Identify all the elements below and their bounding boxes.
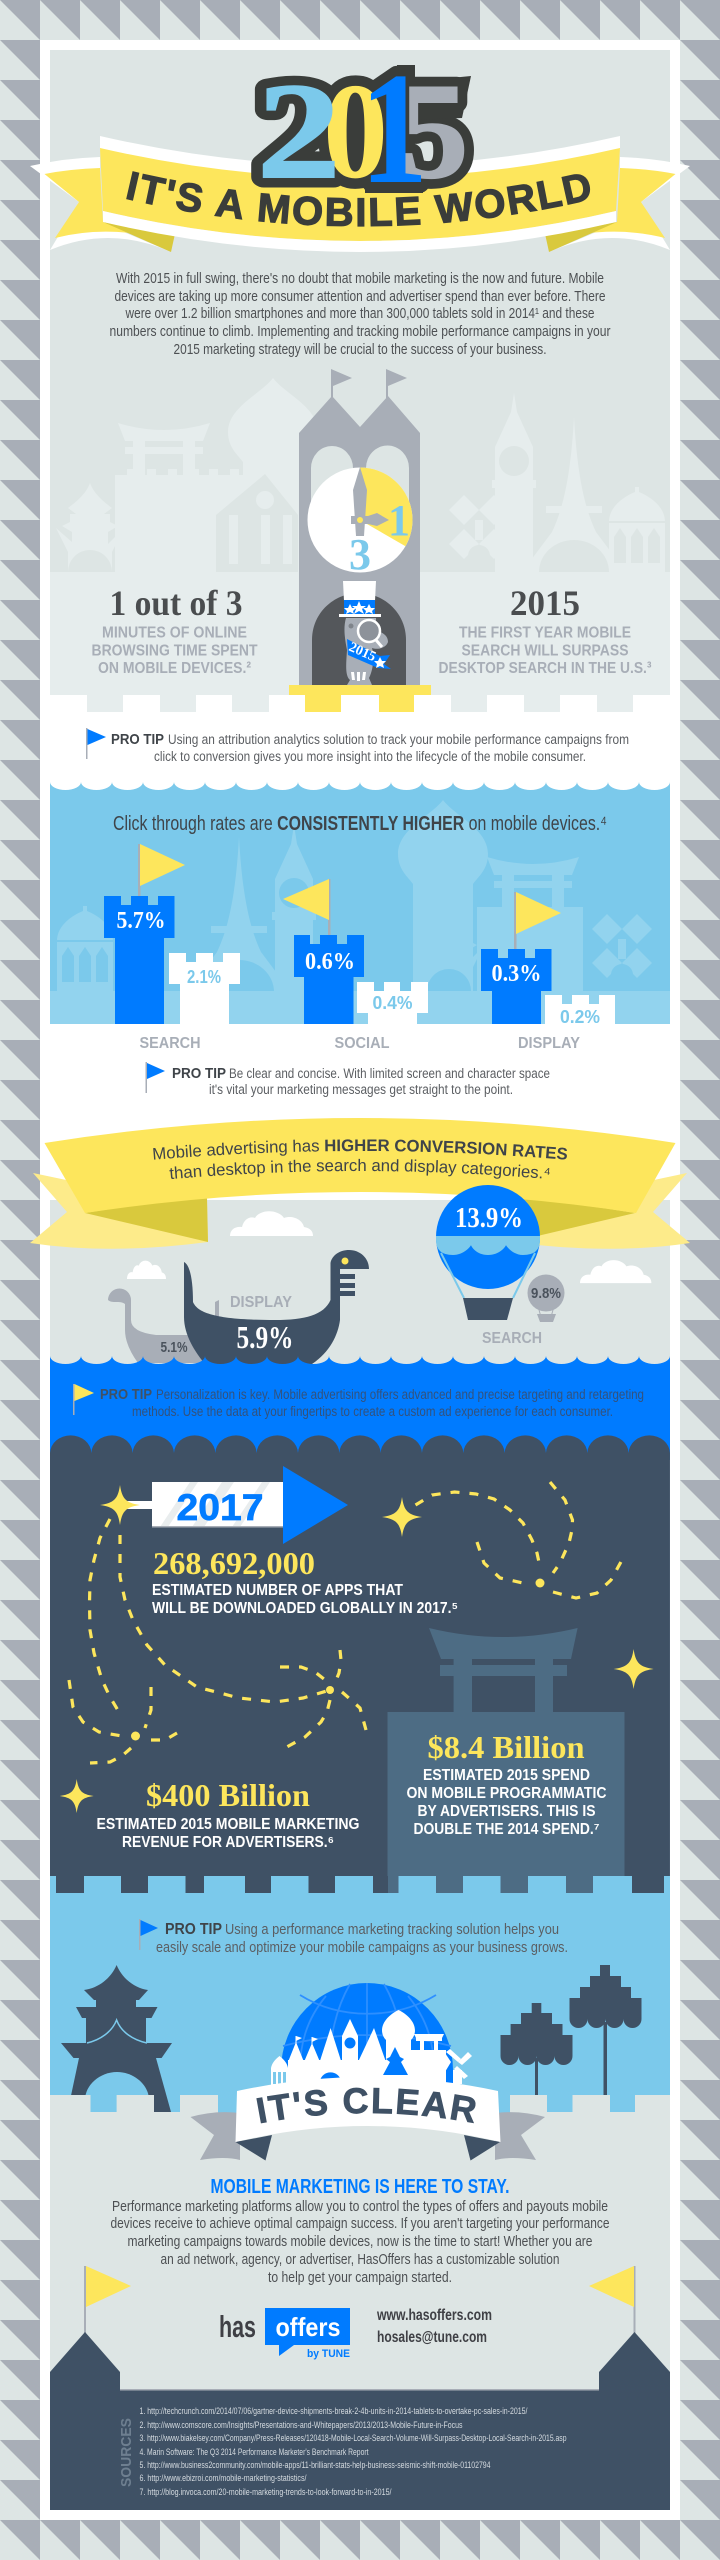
contact details: hosales@tune.com [377,2329,487,2346]
panel: blue water with pro tip 3 [50,1356,670,1460]
contact details [376,2307,492,2346]
stat: 2015 first year: SEARCH WILL SURPASS [462,642,629,660]
contact details: www.hasoffers.com [376,2307,492,2324]
banner: It's clear: IT'S CLEAR [256,2088,476,2124]
pro tip 2: Be clear and concise. With limited screen and character space [229,1066,550,1081]
bar chart: social: 0.6% [305,949,355,975]
logo: 2015 numerals: 2 [257,56,341,207]
bar chart: search: 5.7% [116,908,166,934]
logo: 2015 numerals [257,41,471,218]
stat: 2015 first year: THE FIRST YEAR MOBILE [459,624,631,642]
stat: 1 out of 3: ON MOBILE DEVICES.² [98,660,251,677]
stat: programmatic spend: DOUBLE THE 2014 SPEND.⁷ [414,1821,600,1838]
panel: dark 2017 section [50,1435,670,2116]
stat: 1 out of 3 [92,583,258,677]
heading: mobile marketing is here to stay: MOBILE MARKETING IS HERE TO STAY. [210,2176,510,2198]
block: torii and spend panel [388,1628,624,1876]
banner: conversion rates [30,1118,690,1249]
bar chart: display [481,892,615,1052]
text block: closing paragraph [110,2199,610,2286]
bar chart: display: 0.2% [560,1007,600,1027]
white band after chart [50,1024,670,1200]
banner: It's a mobile world [30,136,690,252]
sources: 6. http://www.ebizroi.com/mobile-marketing-statistics/ [140,2473,307,2483]
title: 2015 it's a mobile world [30,41,690,252]
heading: conversion rates [153,1139,567,1179]
heading: conversion rates: Mobile advertising has HIGHER CONVERSION RATES [153,1139,567,1160]
stat: programmatic spend: BY ADVERTISERS. THIS IS [418,1803,596,1820]
logo: has offers by TUNE: by TUNE [307,2348,350,2360]
pro tip 4: Using a performance marketing tracking solution helps you [225,1922,559,1938]
chart: gondolas display: 5.1% [160,1339,188,1356]
logo: has offers by TUNE: has [219,2309,256,2344]
text block: intro paragraph: were over 1.2 billion smartphones and more than 300,000 tablets sold in 2014¹ and these [125,306,595,322]
bar chart: social: 0.4% [372,993,412,1013]
text block: intro paragraph: devices are taking up more consumer attention and advertiser spend than ever before. There [114,289,606,305]
text block: closing paragraph: Performance marketing platforms allow you to control the types of offers and payouts mobile [112,2199,608,2215]
bar chart: social: SOCIAL [334,1035,390,1052]
tower base [289,685,431,695]
panel: blue water with pro tip 3: Personalization is key. Mobile advertising offers advanced and precise targeting and retargeting [156,1387,644,1402]
stat: apps downloaded: ESTIMATED NUMBER OF APPS THAT [152,1582,403,1599]
bar chart: display: 0.3% [492,961,542,987]
icon: dots [131,1578,544,1740]
text block: closing paragraph: an ad network, agency, or advertiser, HasOffers has a customizable solution [160,2252,560,2268]
stat: apps downloaded: WILL BE DOWNLOADED GLOBALLY IN 2017.⁵ [152,1600,458,1617]
bar chart: search [104,844,240,1052]
stat: 1 out of 3: MINUTES OF ONLINE [102,624,247,642]
text block: closing paragraph: devices receive to achieve optimal campaign success. If you aren't targeting your performance [110,2216,610,2232]
logo: 2015 numerals: 5 [400,55,468,207]
white merlons and pro tip band [50,695,670,782]
chart: clock pie 1 of 3: 1 [388,496,410,545]
stat: programmatic spend: $8.4 Billion [428,1729,585,1765]
icon: stars [60,1485,654,1813]
footer castle with flags [50,2266,670,2510]
icon: globe with skyline [271,1983,472,2092]
stat: 2015 first year [438,583,652,677]
chart: gondolas display: 5.9% [236,1319,294,1355]
stat: programmatic spend: ESTIMATED 2015 SPEND [423,1767,590,1784]
logo: has offers by TUNE [219,2308,350,2360]
panel: blue water with pro tip 3: PRO TIP [100,1386,152,1403]
text block: closing paragraph: marketing campaigns towards mobile devices, now is the time to start! Whether you are [128,2234,592,2250]
dashed flight paths [69,1482,622,1763]
bar chart: display: DISPLAY [518,1035,580,1052]
chart: balloons search: 13.9% [455,1203,523,1234]
stat: revenue: REVENUE FOR ADVERTISERS.⁶ [122,1834,334,1851]
logo: 2015 numerals: 5 [400,55,468,207]
logo: 2015 numerals: 0 [323,55,388,207]
pro tip 1: Using an attribution analytics solution to track your mobile performance campaigns from [168,732,629,747]
banner: It's clear [190,2078,545,2160]
text block: intro paragraph: numbers continue to climb. Implementing and tracking mobile performance campaigns in your [110,324,611,340]
chart: gondolas display: DISPLAY [230,1294,292,1311]
icon: umbrella trees [500,1965,642,2098]
pro tip 4: easily scale and optimize your mobile campaigns as your business grows. [156,1940,568,1956]
stat: 1 out of 3: BROWSING TIME SPENT [92,642,258,660]
sources: 7. http://blog.invoca.com/20-mobile-marketing-trends-to-look-forward-to-in-2015/ [140,2487,392,2497]
bar chart: search: 2.1% [187,967,221,987]
sources: 5. http://www.business2community.com/mobile-apps/11-brilliant-stats-help-business-seismic-shift-mobile-01102794 [140,2460,490,2470]
bar chart: social [283,879,428,1052]
logo: has offers by TUNE: offers [276,2312,340,2342]
stat: programmatic spend: ON MOBILE PROGRAMMATIC [406,1785,607,1802]
icon: clouds [127,1211,651,1283]
stat: 2015 first year: DESKTOP SEARCH IN THE U.S.³ [438,660,652,677]
text block: intro paragraph: With 2015 in full swing, there's no doubt that mobile marketing is the now and future. Mobile [116,271,604,287]
heading: conversion rates: than desktop in the search and display categories.⁴ [169,1158,550,1179]
clock tower [289,369,431,695]
stat: revenue: $400 Billion [146,1777,310,1813]
stat: 2015 first year: 2015 [510,583,580,623]
panel: blue water with pro tip 3: methods. Use the data at your fingertips to create a custom ad experience for each consumer. [132,1404,613,1419]
pro tip 2 [146,1062,550,1097]
pro tip 2: it's vital your marketing messages get straight to the point. [209,1082,513,1097]
pro tip 4: PRO TIP [165,1921,222,1938]
chart: gondolas display [108,1250,369,1364]
chart: balloons search: 9.8% [531,1285,561,1302]
arrow sign: 2017: 2017 [176,1487,264,1528]
castle wall merlons [50,2095,670,2130]
heading: click through rates: Click through rates are CONSISTENTLY HIGHER on mobile devices.⁴ [113,813,607,835]
stat: apps downloaded: 268,692,000 [153,1545,315,1581]
text block: intro paragraph: 2015 marketing strategy will be crucial to the success of your business. [174,342,546,358]
arrow sign: 2017 [120,1466,348,1544]
sources [118,2406,566,2497]
stat: revenue [96,1777,360,1851]
logo: 2015 numerals: 1 [360,41,428,218]
text block: closing paragraph: to help get your campaign started. [268,2270,452,2286]
icon: Uncle Sam mole with magnifier: 2015 [346,640,378,665]
sources: SOURCES [118,2418,135,2487]
logo: 2015 numerals: 2 [257,56,341,207]
panel: intro skyline [50,378,670,712]
pro tip 1: PRO TIP [111,731,164,748]
logo: 2015 numerals: 1 [360,41,428,218]
icon: pagoda [61,1965,172,2112]
pro tip 1: click to conversion gives you more insight into the lifecycle of the mobile consumer. [154,749,586,764]
panel: conversion rates [30,1118,690,1364]
stat: 1 out of 3: 1 out of 3 [110,583,242,623]
heading: It's a mobile world: IT'S A MOBILE WORLD [126,171,590,227]
panel: click through rates [50,778,670,1024]
logo: 2015 numerals: 0 [323,55,388,207]
pro tip 2: PRO TIP [172,1065,226,1082]
pro tip 1 [86,728,629,764]
sources: 3. http://www.biakelsey.com/Company/Press-Releases/120418-Mobile-Local-Search-Volume-Will-Surpass-Desktop-Local-Search-in-2015.asp [140,2433,566,2443]
light blue section [50,1876,670,2116]
chart: clock pie 1 of 3 [308,467,413,579]
stat: apps downloaded [152,1545,458,1617]
chart: balloons search [436,1185,564,1347]
sources: 2. http://www.comscore.com/Insights/Presentations-and-Whitepapers/2013/2013-Mobile-Future-in-Focus [140,2420,463,2430]
icon: Uncle Sam mole with magnifier [339,581,391,685]
chart: clock pie 1 of 3: 3 [349,530,371,579]
sources: 4. Marin Software: The Q3 2014 Performance Marketer's Benchmark Report [140,2447,369,2457]
bar chart: search: SEARCH [140,1035,200,1052]
sources: 1. http://techcrunch.com/2014/07/06/gartner-device-shipments-break-2-4b-units-in-2014-tablets-to-overtake-pc-sales-in-2015/ [140,2406,528,2416]
tower yellow merlons [305,695,414,712]
stat: programmatic spend [406,1729,607,1838]
stat: revenue: ESTIMATED 2015 MOBILE MARKETING [96,1816,360,1833]
pro tip 4 [139,1919,568,1956]
chart: balloons search: SEARCH [482,1330,542,1347]
text block: intro paragraph [110,271,611,358]
